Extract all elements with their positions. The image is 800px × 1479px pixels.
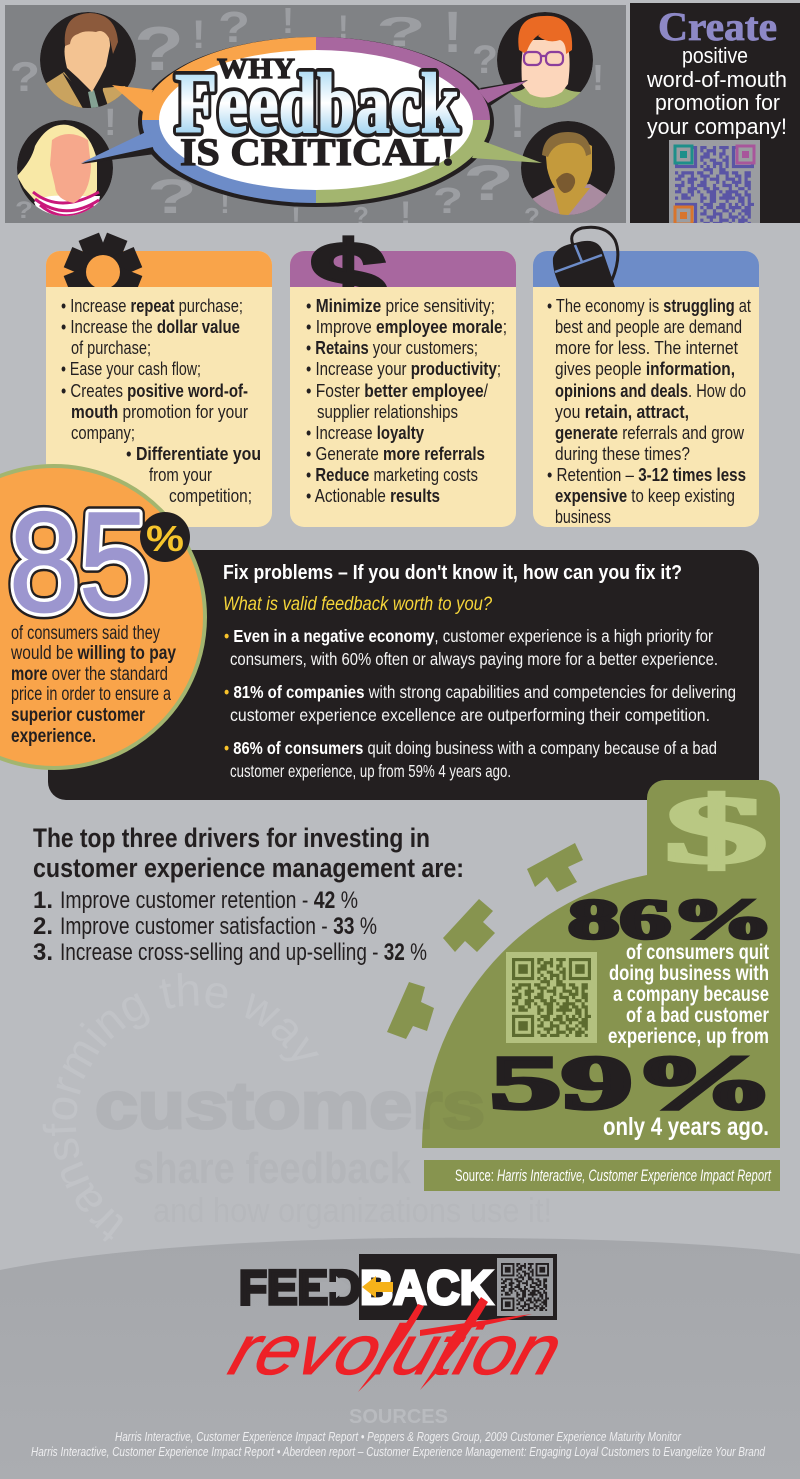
background question marks: ? [376,8,426,55]
drivers list: Increase cross-selling and up-selling - 32 % [60,939,427,966]
panel: green 86 percent statistic [422,776,780,1148]
background question marks: ! [192,13,205,57]
panel: card 2 benefits [290,221,516,527]
arrow block 2 [443,899,495,952]
sources heading: SOURCES [349,1406,448,1428]
watermark: transforming the way customers share feedback: transforming the way [34,963,334,1254]
title: why feedback is critical: Feedback [175,55,459,151]
background question marks: ? [218,3,250,52]
title: why feedback is critical: WHY [217,53,295,85]
background question marks [10,0,604,235]
heading: create: Create [658,4,777,49]
card 3 text: you retain, attract, [555,401,689,422]
promotion text: word-of-mouth [646,67,787,92]
stat description [608,941,769,1048]
callout text: price in order to ensure a [11,684,171,705]
drivers list: Improve customer satisfaction - 33 % [60,913,377,940]
logo wordmark [239,1262,493,1315]
icon: gear [64,232,142,287]
background question marks: ! [338,9,349,45]
avatar: red-haired woman with glasses [497,12,593,112]
callout text [10,623,176,747]
background question marks: ? [15,197,33,224]
sources text [31,1429,766,1459]
promotion text: positive [682,43,748,68]
background question marks: ! [282,0,294,41]
background question marks: ! [104,102,117,144]
card 1 text: • Creates positive word-of- [61,380,248,401]
card 3 text: gives people information, [555,358,735,379]
drivers list [33,887,427,966]
bullet: negative economy [224,626,718,669]
bullet: 81 percent of companies: customer experience excellence are outperforming their competition. [230,705,710,725]
callout text: of consumers said they [11,623,160,644]
speech bubble [81,37,542,207]
promotion text: promotion for [655,90,780,115]
card 1 text: • Differentiate you [126,443,261,464]
logo wordmark: FEED [239,1262,361,1315]
watermark: transforming the way customers share feedback: and how organizations use it! [153,1192,552,1230]
drivers heading: customer experience management are: [33,853,464,883]
icon: light dollar sign: $ [664,776,768,883]
background question marks: ! [592,57,604,98]
logo wordmark: BACK [360,1262,493,1315]
panel: create word-of-mouth [630,3,800,231]
QR code [506,952,597,1043]
card 1 text: • Ease your cash flow; [61,358,201,379]
background question marks: ? [433,180,463,221]
background question marks: ! [291,202,301,235]
avatar: man with goatee [521,121,615,220]
panel: card 1 benefits [46,233,272,527]
promotion text: your company! [647,114,787,139]
background question marks: ? [10,53,40,100]
bullet: 81 percent of companies [224,682,736,725]
card 1 text: • Increase the dollar value [61,316,240,337]
card 2 text: • Improve employee morale; [306,316,507,337]
drivers list: 2. [33,913,53,940]
colored QR code [669,140,760,231]
header illustration panel [5,0,626,235]
card 1 text: • Increase repeat purchase; [61,295,243,316]
card 1 text: of purchase; [71,337,151,358]
background question marks: ! [510,95,525,147]
background question marks: ? [472,38,498,82]
background question marks: ! [400,195,411,233]
background question marks: ? [463,155,514,211]
card 1 text: mouth promotion for your [71,401,248,422]
callout text: would be willing to pay [10,643,176,664]
card 3 text: more for less. The internet [555,337,738,358]
card 3 text: • The economy is struggling at [547,295,751,316]
callout: 85 percent circle [0,466,205,768]
footer band [0,1238,800,1479]
logo: feedback revolution [221,1254,571,1392]
card 1 text: from your [149,464,212,485]
icon: dollar sign: $ [308,221,388,337]
card 2 text: • Increase loyalty [306,422,425,443]
drivers list: Improve customer retention - 42 % [60,887,358,914]
card 3 text: opinions and deals. How do [555,380,746,401]
card 2 text: • Reduce marketing costs [306,464,478,485]
card 2 text: • Increase your productivity; [306,358,501,379]
title: why feedback is critical: Feedback [175,55,459,151]
watermark: transforming the way customers share feedback: customers [95,1068,485,1142]
subheading: valid feedback: What is valid feedback worth to you? [223,594,492,615]
source bar [424,1160,780,1191]
card 3 text: business [555,506,611,527]
drivers list: 3. [33,939,53,966]
card 2 text: • Foster better employee/ [306,380,489,401]
background question marks: ? [134,15,184,84]
background question marks: ? [524,202,540,232]
big number 85: 85 [9,483,149,642]
avatar: blonde woman [17,120,113,216]
card 2 text [306,295,507,506]
card 2 text: • Generate more referrals [306,443,485,464]
card 1 text: company; [71,422,135,443]
background question marks: ? [353,201,369,231]
bullet: negative economy: • Even in a negative economy, customer experience is a high priority for [224,626,713,646]
stat: 86 percent: 86% [568,889,774,951]
big number 85: 85 [9,483,149,642]
drivers heading [33,823,464,883]
arrow block 3 [387,982,434,1039]
callout text: more over the standard [11,664,168,685]
bullet: negative economy: consumers, with 60% often or always paying more for a better experience. [230,649,718,669]
title: why feedback is critical [175,53,459,174]
callout text: superior customer [11,705,145,726]
bullet: 86 percent of consumers: customer experience, up from 59% 4 years ago. [230,761,511,781]
card 3 text: best and people are demand [555,316,742,337]
big number 85: 85 [9,483,149,642]
watermark: transforming the way customers share feedback [95,1068,552,1230]
card 2 text: supplier relationships [317,401,458,422]
bullet: 86 percent of consumers [224,738,717,781]
percent badge [140,512,190,562]
panel: fix problems [48,550,759,800]
bullet: 86 percent of consumers: • 86% of consumers quit doing business with a company because of a bad [224,738,717,758]
stat: 59 percent: 59% [490,1041,775,1125]
background question marks: ! [220,187,230,220]
stat footer: only 4 years ago. [603,1113,769,1141]
arrow block 1 [527,843,583,892]
card 2 text: • Minimize price sensitivity; [306,295,495,316]
avatar: man in tan suit [40,12,136,112]
panel: card 3 economy [533,227,759,527]
background question marks: ? [147,171,197,224]
card 1 text [61,295,261,506]
drivers heading: The top three drivers for investing in [33,823,430,853]
bullet: 81 percent of companies: • 81% of companies with strong capabilities and competencies for delivering [224,682,736,702]
background question marks: ! [443,0,462,65]
icon: computer mouse [553,227,618,287]
card 3 text: generate referrals and grow [555,422,745,443]
watermark: transforming the way customers share feedback: share feedback [133,1144,411,1193]
card 3 text: • Retention – 3-12 times less [547,464,746,485]
drivers list: 1. [33,887,53,914]
card 1 text: competition; [169,485,252,506]
card 3 text: expensive to keep existing [555,485,735,506]
title: why feedback is critical: IS CRITICAL! [180,131,455,174]
logo QR code [497,1258,553,1316]
revolution script: revolution [221,1312,571,1390]
promotion text [646,43,787,139]
card 3 text [547,295,751,527]
callout text: experience. [11,726,96,747]
card 2 text: • Actionable results [306,485,440,506]
heading: fix problems: Fix problems – If you don't know it, how can you fix it? [223,562,682,584]
card 3 text: during these times? [555,443,690,464]
percent badge: % [146,518,184,559]
card 2 text: • Retains your customers; [306,337,478,358]
